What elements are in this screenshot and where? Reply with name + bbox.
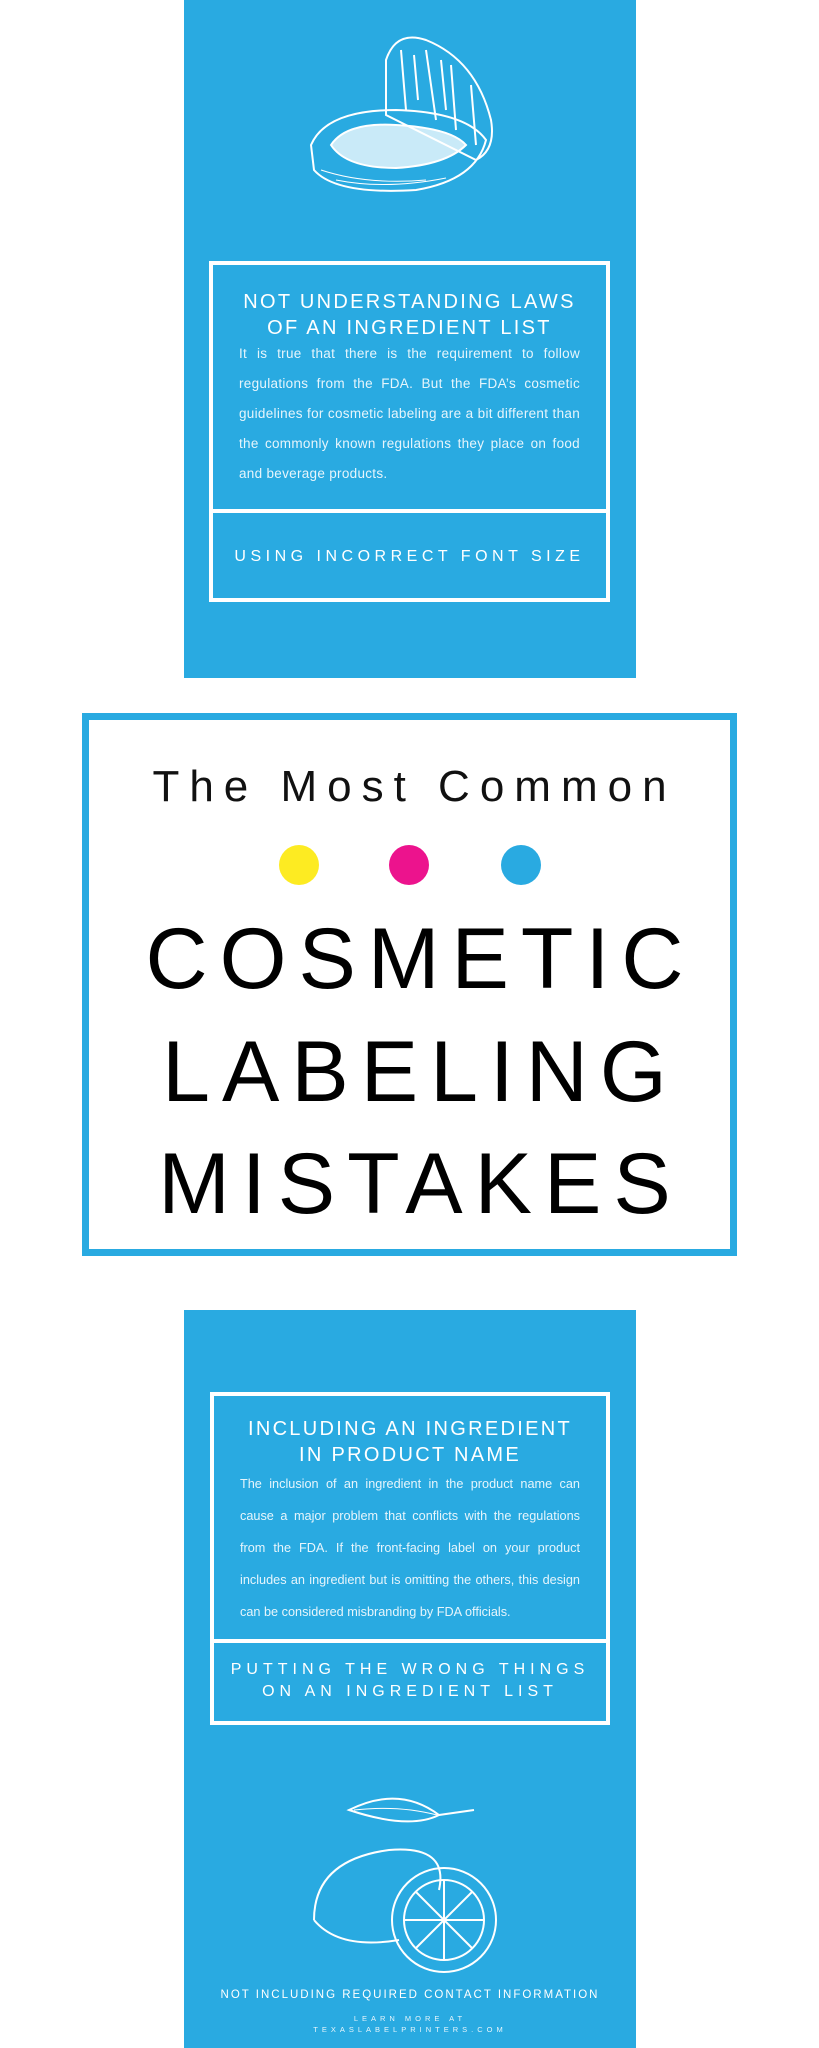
- text block: It is true that there is the requirement to follow regulations from the FDA. But the FDA’s cosmetic guidelines for cosmetic labeling are a bit different than the commonly known regulations they place on food and beverage products.: [239, 346, 580, 481]
- box: incorrect font size: USING INCORRECT FONT SIZE: [234, 548, 585, 565]
- heading: NOT UNDERSTANDING LAWS: [243, 291, 576, 313]
- heading: INCLUDING AN INGREDIENT: [248, 1418, 572, 1440]
- title line 1: COSMETIC: [146, 911, 695, 1007]
- dots: [279, 845, 541, 885]
- subtitle: The Most Common: [152, 762, 677, 811]
- heading: [248, 1418, 572, 1466]
- heading: [243, 291, 576, 339]
- box: not understanding laws: [209, 261, 610, 513]
- icon: papaya: [310, 36, 493, 192]
- box: wrong things: [210, 1639, 610, 1725]
- box: wrong things: PUTTING THE WRONG THINGS: [231, 1661, 589, 1678]
- text: contact information: NOT INCLUDING REQUIRED CONTACT INFORMATION: [221, 1989, 599, 2001]
- box: wrong things: ON AN INGREDIENT LIST: [262, 1683, 558, 1700]
- title line 3: MISTAKES: [158, 1136, 683, 1232]
- box: ingredient in product name: [210, 1392, 610, 1643]
- text block: The inclusion of an ingredient in the product name can cause a major problem that conflicts with the regulations from the FDA. If the front-facing label on your product includes an ingredient but is omitting the others, this design can be considered misbranding by FDA officials.: [240, 1477, 580, 1619]
- heading: OF AN INGREDIENT LIST: [267, 317, 552, 339]
- heading: IN PRODUCT NAME: [299, 1444, 521, 1466]
- footer: [313, 2014, 507, 2034]
- box: incorrect font size: [209, 509, 610, 602]
- footer: TEXASLABELPRINTERS.COM: [313, 2025, 507, 2034]
- icon: lemon: [313, 1798, 497, 1973]
- panel: top blue: [184, 0, 636, 678]
- panel: bottom blue: [184, 1310, 636, 2048]
- title line 2: LABELING: [162, 1024, 679, 1120]
- title card: [82, 713, 737, 1256]
- footer: LEARN MORE AT: [354, 2014, 466, 2023]
